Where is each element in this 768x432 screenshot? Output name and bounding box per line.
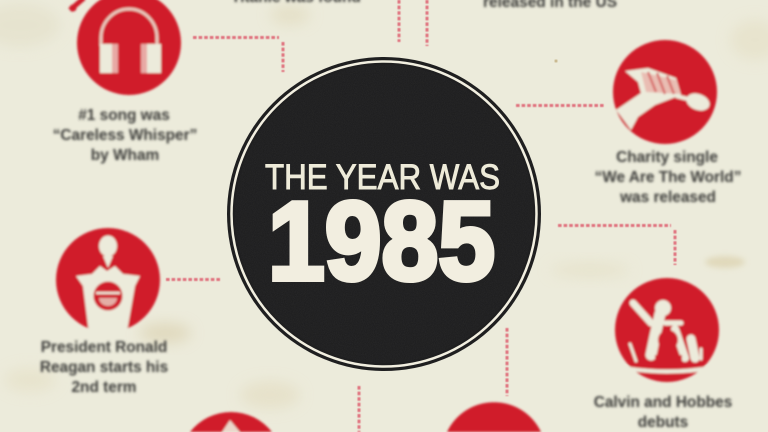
caption: Calvin and Hobbes debuts: Calvin and Hobbes — [594, 394, 732, 411]
heading: the year was: THE YEAR WAS — [265, 158, 500, 197]
icon: bottom right circle — [447, 402, 541, 432]
caption: Calvin and Hobbes debuts: debuts — [638, 414, 688, 431]
caption: Calvin and Hobbes debuts — [594, 394, 732, 431]
caption: number one song: “Careless Whisper” — [53, 127, 197, 144]
caption: Reagan second term: Reagan starts his — [40, 359, 168, 376]
caption: number one song: #1 song was — [78, 107, 170, 124]
caption: Reagan second term: President Ronald — [41, 339, 167, 356]
caption: Reagan second term — [40, 339, 168, 396]
icon: headphones — [70, 0, 181, 95]
icon: bottom left circle — [190, 412, 272, 432]
caption: We Are The World: was released — [619, 189, 716, 206]
caption: number one song — [53, 107, 197, 164]
caption: Reagan second term: 2nd term — [72, 379, 136, 396]
caption: We Are The World: Charity single — [616, 149, 718, 166]
icon: microphone in hand — [613, 40, 717, 144]
dashed connector lines — [166, 0, 675, 432]
icon: Reagan at podium — [56, 228, 160, 332]
heading: 1985: 1985 — [268, 180, 495, 304]
central badge — [227, 57, 541, 371]
caption: We Are The World — [595, 149, 741, 206]
caption: We Are The World: “We Are The World” — [595, 169, 741, 186]
icon: Calvin and Hobbes — [615, 278, 719, 382]
caption: number one song: by Wham — [91, 147, 159, 164]
